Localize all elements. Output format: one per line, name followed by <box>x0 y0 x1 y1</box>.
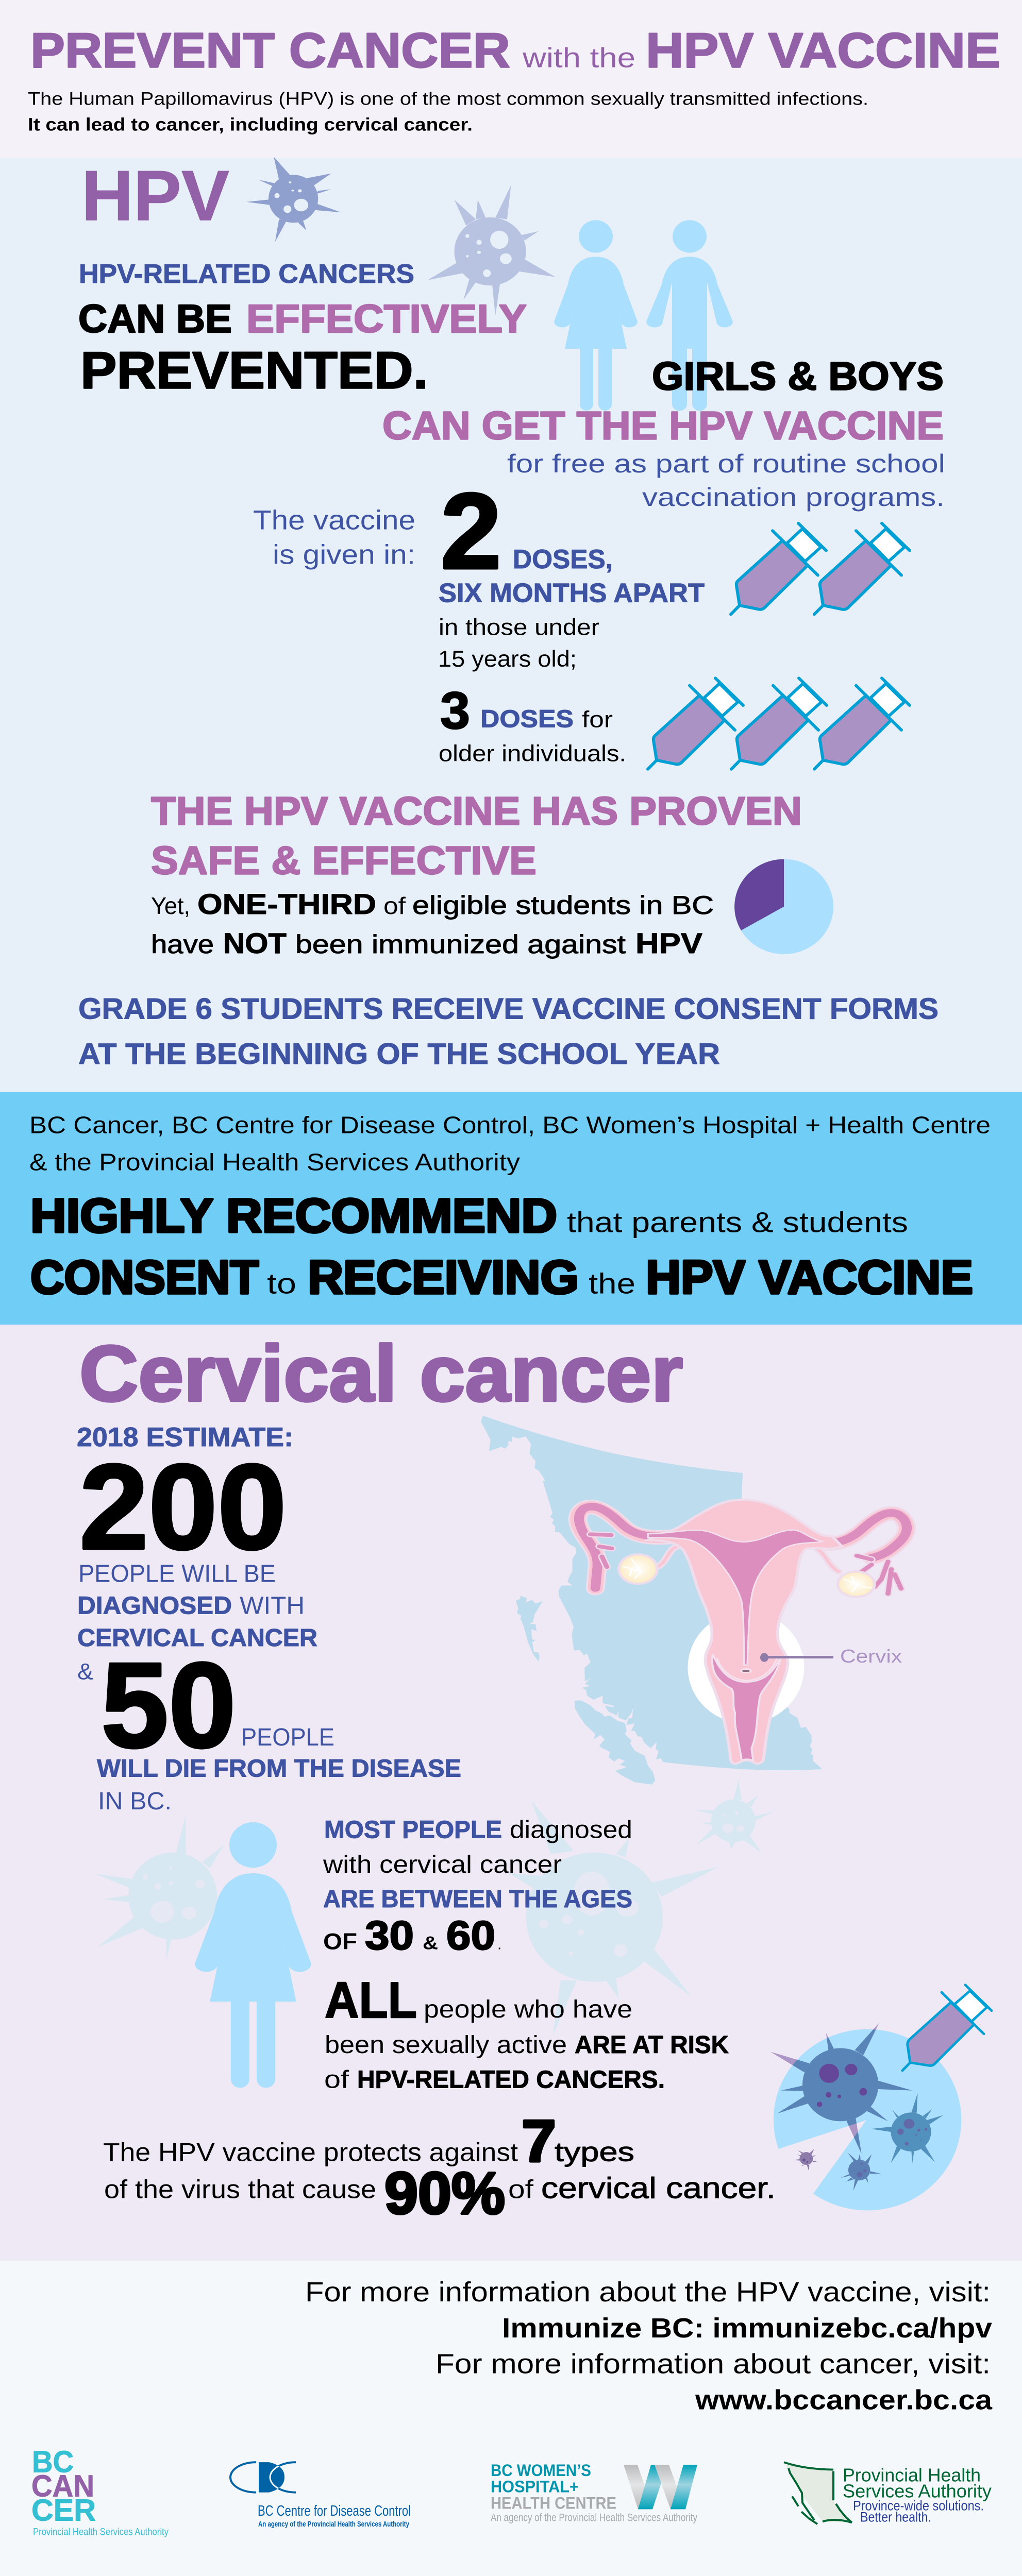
title <box>30 22 1000 78</box>
text: girls and boys: CAN GET THE HPV VACCINE <box>382 403 944 448</box>
text: two doses: DOSES, <box>513 545 613 574</box>
text: consent to receiving <box>30 1250 973 1303</box>
logo: BC Women's Hospital <box>491 2462 697 2523</box>
heading: cervical cancer: Cervical cancer <box>79 1330 683 1418</box>
logo: BC Cancer: CAN <box>31 2469 94 2503</box>
text: grade 6 consent forms: AT THE BEGINNING OF THE SCHOOL YEAR <box>78 1038 720 1071</box>
text: the vaccine is given in <box>253 505 415 570</box>
text: three doses <box>439 682 626 766</box>
text: HPV-related cancers prevented: HPV-RELATED CANCERS <box>79 259 414 289</box>
text: consent to receiving: CONSENT <box>30 1250 259 1303</box>
logo: BC Centre for Disease Control: An agency of the Provincial Health Services Authority <box>258 2520 410 2529</box>
logo: Provincial Health Services Authority <box>784 2462 992 2524</box>
text: two doses: 15 years old; <box>438 646 577 672</box>
text: more information: For more information about cancer, visit: <box>435 2348 991 2379</box>
intro text: It can lead to cancer, including cervical cancer. <box>28 114 473 134</box>
text: 50 will die: WILL DIE FROM THE DISEASE <box>97 1755 461 1782</box>
text: HPV-related cancers prevented: EFFECTIVELY <box>246 297 527 341</box>
text: 2018 estimate 200: 2018 ESTIMATE: <box>77 1422 293 1452</box>
text: the vaccine is given in: The vaccine <box>253 505 415 535</box>
text: most people ages: OF <box>323 1928 357 1954</box>
text: HPV-related cancers prevented: CAN BE <box>78 297 232 341</box>
text: one-third not immunized: Yet, <box>151 892 190 919</box>
text: two doses: SIX MONTHS APART <box>439 578 705 608</box>
text: girls and boys: for free as part of routine school <box>507 449 945 478</box>
text: most people ages: diagnosed <box>510 1816 632 1843</box>
main virus <box>770 2023 912 2154</box>
logo: BC Women's Hospital: BC WOMEN’S <box>491 2462 591 2480</box>
illustration: viruses shielded by vaccine <box>770 2023 961 2210</box>
text: three doses: 3 <box>440 682 470 740</box>
title: HPV VACCINE <box>646 22 1000 78</box>
third virus <box>841 2153 881 2191</box>
text: most people ages: MOST PEOPLE <box>324 1816 502 1843</box>
panel: header <box>0 0 1022 158</box>
text: all people at risk: ALL <box>325 1972 417 2029</box>
text: consent to receiving: RECEIVING <box>308 1250 579 1303</box>
text: all people at risk: of <box>324 2066 349 2093</box>
logo: Provincial Health Services Authority: Province-wide solutions. <box>853 2498 984 2513</box>
text: 2018 estimate 200: 200 <box>79 1439 287 1574</box>
text: consent to receiving: HPV VACCINE <box>646 1250 973 1303</box>
heading: HPV: HPV <box>81 156 229 235</box>
text: the vaccine is given in: is given in: <box>273 539 415 570</box>
text: two doses: 2 <box>441 471 501 591</box>
logo: BC Centre for Disease Control <box>230 2462 411 2529</box>
text: one-third not immunized: HPV <box>635 928 702 960</box>
text: 2018 estimate 200: PEOPLE WILL BE <box>78 1560 276 1587</box>
title: PREVENT CANCER <box>30 22 510 78</box>
second virus <box>871 2093 943 2163</box>
logo: BC Cancer: Provincial Health Services Authority <box>33 2527 169 2537</box>
text: three doses: DOSES <box>480 705 574 733</box>
cervix label <box>760 1645 902 1667</box>
intro text <box>28 88 868 134</box>
icon: syringe <box>902 1985 992 2071</box>
text: 2018 estimate 200: DIAGNOSED <box>77 1592 232 1619</box>
text: more information: Immunize BC: immunizebc.ca/hpv <box>502 2312 992 2344</box>
text: most people ages: ARE BETWEEN THE AGES <box>323 1886 632 1913</box>
text: 2018 estimate 200 <box>77 1422 317 1652</box>
text: all people at risk <box>324 1972 729 2093</box>
text: grade 6 consent forms: GRADE 6 STUDENTS RECEIVE VACCINE CONSENT FORMS <box>78 993 939 1025</box>
text: one-third not immunized: NOT <box>223 928 287 960</box>
text: most people ages: with cervical cancer <box>323 1851 562 1878</box>
text: protects against 7 types: cervical cancer. <box>541 2172 776 2205</box>
text: 50 will die <box>77 1637 461 1815</box>
text: one-third not immunized: have <box>151 930 214 959</box>
text: three doses: older individuals. <box>439 740 626 766</box>
text: one-third not immunized: of <box>383 892 406 919</box>
text: organisations <box>29 1111 991 1175</box>
text: safe and effective: SAFE & EFFECTIVE <box>151 838 537 883</box>
text: safe and effective: THE HPV VACCINE HAS PROVEN <box>151 789 802 833</box>
text: protects against 7 types: of the virus that cause <box>104 2175 376 2204</box>
text: protects against 7 types: The HPV vaccine protects against <box>103 2138 518 2166</box>
intro text: The Human Papillomavirus (HPV) is one of the most common sexually transmitted infections. <box>28 88 868 109</box>
text: safe and effective <box>151 789 802 883</box>
logo: BC Cancer: CER <box>31 2493 96 2527</box>
text: girls and boys: vaccination programs. <box>642 483 945 512</box>
text: more information: For more information about the HPV vaccine, visit: <box>305 2276 991 2308</box>
text: three doses: for <box>582 706 613 732</box>
text: two doses <box>438 471 705 672</box>
chart: one-third pie <box>734 859 833 954</box>
text: most people ages <box>323 1816 632 1958</box>
text: organisations: BC Cancer, BC Centre for Disease Control, BC Women’s Hospital + Health Centre <box>29 1111 991 1138</box>
icon: boy <box>646 220 733 411</box>
text: all people at risk: people who have <box>424 1996 632 2023</box>
white circle behind cervix <box>688 1612 804 1723</box>
logo: BC Women's Hospital: HOSPITAL+ <box>491 2478 579 2497</box>
text: HPV-related cancers prevented: PREVENTED. <box>80 342 428 399</box>
panel: footer <box>32 2281 993 2537</box>
text: more information: www.bccancer.bc.ca <box>695 2384 993 2415</box>
panel: cervical cancer <box>0 1325 1022 2261</box>
icon: virus large <box>428 185 556 315</box>
text: protects against 7 types: 7 <box>522 2108 556 2174</box>
text: two doses: in those under <box>439 615 599 640</box>
logo: BC Centre for Disease Control: BC Centre for Disease Control <box>258 2502 411 2519</box>
ovaries <box>619 1554 875 1597</box>
text: grade 6 consent forms <box>78 993 939 1071</box>
icon: two syringes <box>731 523 910 614</box>
decorative viruses <box>94 1780 774 2036</box>
text: one-third not immunized <box>151 889 714 960</box>
text: 50 will die: PEOPLE <box>241 1724 334 1751</box>
text: most people ages: . <box>497 1936 501 1953</box>
text: one-third not immunized: eligible students in BC <box>412 891 714 920</box>
text: protects against 7 types: 90% <box>384 2160 505 2226</box>
logo: Provincial Health Services Authority: Services Authority <box>843 2480 992 2501</box>
panel: HPV <box>0 156 1022 1092</box>
text: all people at risk: HPV-RELATED CANCERS. <box>357 2066 665 2093</box>
logo: Provincial Health Services Authority: Provincial Health <box>843 2464 981 2485</box>
panel: recommendation <box>0 1092 1022 1325</box>
text: 50 will die: IN BC. <box>98 1788 172 1815</box>
text: consent to receiving: to <box>267 1268 296 1300</box>
text: most people ages: 30 <box>365 1913 414 1958</box>
text: one-third not immunized: been immunized against <box>295 930 626 959</box>
text: highly recommend: HIGHLY RECOMMEND <box>30 1189 557 1243</box>
icon: three syringes <box>648 678 910 769</box>
logo: BC Cancer <box>31 2445 169 2537</box>
cervix label: Cervix <box>840 1645 902 1667</box>
text: one-third not immunized: ONE-THIRD <box>197 889 376 921</box>
text: all people at risk: ARE AT RISK <box>575 2031 729 2059</box>
text: protects against 7 types: of <box>508 2175 534 2204</box>
title: with the <box>522 42 635 73</box>
logo: BC Cancer: BC <box>32 2445 74 2479</box>
text: girls and boys <box>382 354 945 512</box>
icon: woman <box>195 1822 311 2088</box>
text: 50 will die: & <box>77 1658 93 1684</box>
small outside virus <box>793 2149 818 2171</box>
text: highly recommend <box>30 1189 908 1243</box>
logo: BC Women's Hospital: An agency of the Provincial Health Services Authority <box>491 2511 697 2523</box>
text: 2018 estimate 200: CERVICAL CANCER <box>77 1624 317 1652</box>
icon: virus small <box>246 157 341 242</box>
text: most people ages: 60 <box>446 1913 495 1958</box>
text: organisations: & the Provincial Health Services Authority <box>29 1148 521 1175</box>
text: girls and boys: GIRLS & BOYS <box>652 354 944 398</box>
text: HPV-related cancers prevented <box>78 259 527 399</box>
illustration: uterus <box>578 1500 907 1764</box>
text: 50 will die: 50 <box>101 1637 236 1773</box>
text: protects against 7 types: types <box>555 2137 634 2167</box>
text: highly recommend: that parents & students <box>567 1207 908 1239</box>
text: protects against 7 types <box>103 2108 776 2226</box>
text: more information <box>305 2276 993 2415</box>
logo: Provincial Health Services Authority: Better health. <box>860 2509 931 2524</box>
text: 2018 estimate 200: WITH <box>240 1592 305 1619</box>
text: all people at risk: been sexually active <box>325 2031 567 2059</box>
text: most people ages: & <box>423 1932 438 1953</box>
text: consent to receiving: the <box>589 1268 635 1300</box>
logo: BC Women's Hospital: HEALTH CENTRE <box>491 2494 616 2513</box>
icon: girl <box>554 220 638 411</box>
map: British Columbia <box>481 1416 822 1785</box>
